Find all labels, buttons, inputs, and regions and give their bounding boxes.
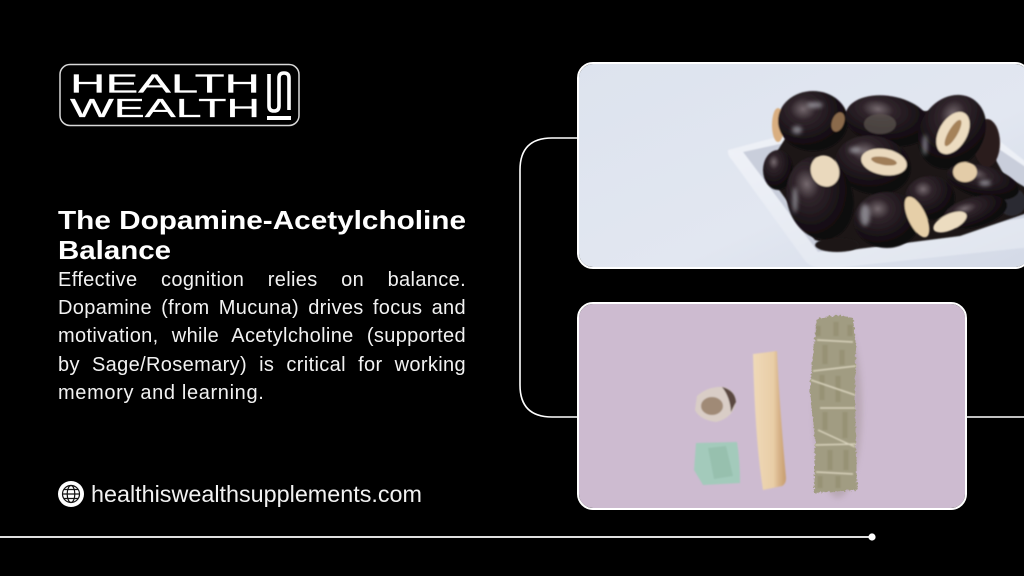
connector: line from lower photo to right edge — [966, 416, 1024, 418]
heading line one: The Dopamine-Acetylcholine — [58, 205, 466, 235]
website address: healthiswealthsupplements.com — [91, 481, 422, 507]
dark mass under beans — [772, 110, 1024, 250]
bowl — [728, 136, 1024, 268]
heading line two: Balance — [58, 235, 171, 265]
logo wordmark line one: HEALTH — [70, 68, 260, 98]
beans — [763, 82, 1024, 252]
body text — [58, 269, 466, 404]
geode stone — [695, 387, 736, 422]
body text: memory and learning. — [58, 382, 264, 404]
body text: motivation, while Acetylcholine (supported — [58, 325, 466, 347]
logo monogram — [267, 73, 291, 118]
logo: Health Is Wealth — [60, 64, 299, 126]
body text: by Sage/Rosemary) is critical for working — [58, 354, 466, 376]
green stone — [694, 442, 740, 485]
connector: bracket linking both photos — [520, 138, 578, 417]
logo wordmark line two: WEALTH — [70, 93, 260, 123]
photo: mucuna beans in white bowl — [578, 63, 1024, 268]
body text: Dopamine (from Mucuna) drives focus and — [58, 297, 466, 319]
body text: Effective cognition relies on balance. — [58, 269, 466, 291]
bean highlights — [792, 102, 991, 226]
icon: globe — [58, 481, 84, 507]
timeline line with end dot — [0, 533, 876, 541]
photo: crystals, palo santo and sage bundle — [578, 303, 966, 509]
sage bundle — [810, 316, 862, 498]
heading — [58, 205, 466, 265]
palo santo wood stick — [753, 351, 786, 490]
